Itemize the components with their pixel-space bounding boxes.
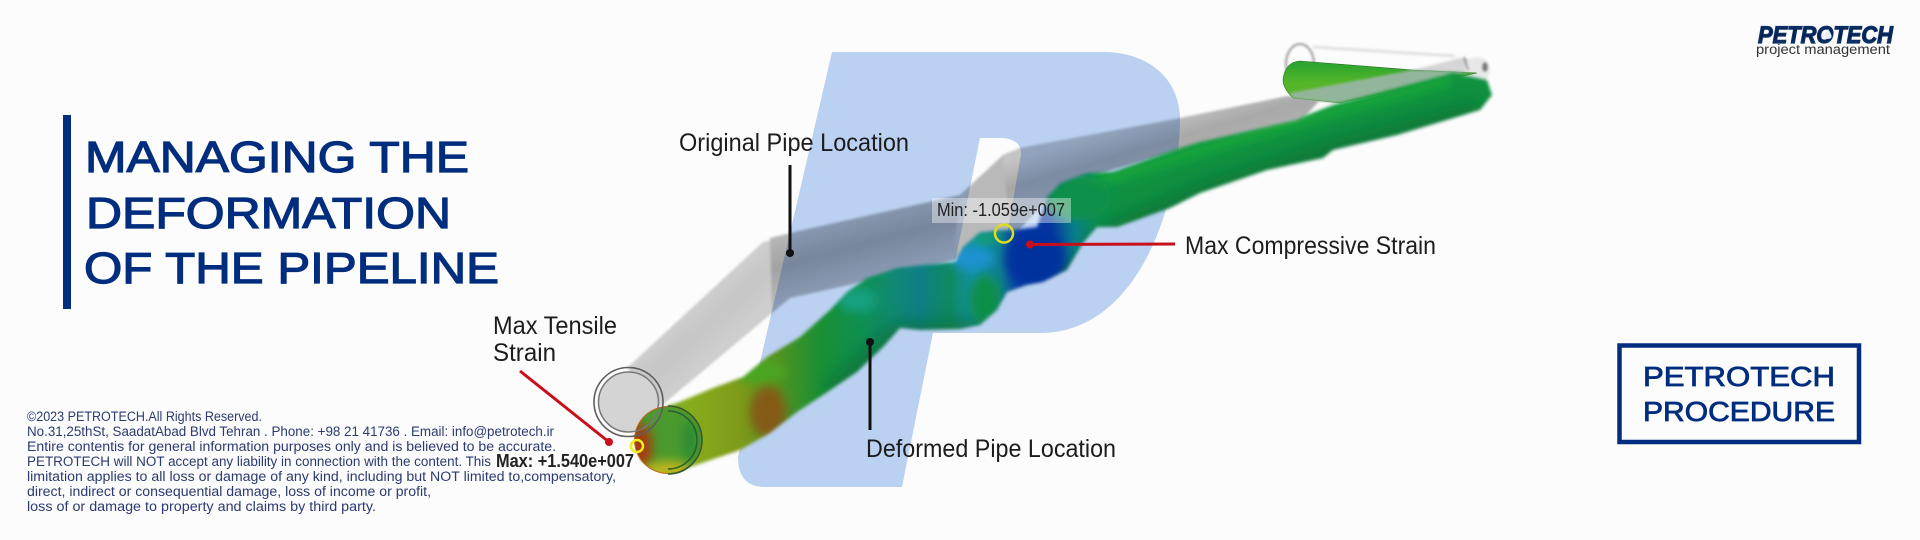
- logo: Petrotech project management: [1756, 22, 1894, 57]
- logo wordmark: PETROTECH: [1758, 22, 1894, 49]
- label: original pipe location: Original Pipe Location: [679, 129, 909, 157]
- logo tagline: project management: [1756, 42, 1890, 57]
- label: max tensile strain: Max Tensile: [493, 312, 617, 340]
- marker: max strain: [631, 440, 643, 452]
- diagram: pipeline deformation: [493, 44, 1510, 490]
- leader: deformed pipe: [866, 338, 874, 430]
- label: deformed pipe location: Deformed Pipe Location: [866, 435, 1116, 463]
- label: max compressive strain: Max Compressive Strain: [1185, 232, 1436, 260]
- title: DEFORMATION: [86, 189, 451, 238]
- footer legal text: [27, 409, 616, 514]
- label: max tensile strain: Strain: [493, 339, 556, 367]
- procedure box: [1620, 346, 1859, 442]
- label: min value: Min: -1.059e+007: [937, 200, 1065, 220]
- label: max value: Max: +1.540e+007: [496, 451, 634, 471]
- original grey pipe: [627, 44, 1490, 407]
- watermark: blue letter P: [738, 52, 1180, 487]
- title block: [63, 115, 499, 309]
- leader: max compressive strain: [1026, 240, 1175, 248]
- box text: PROCEDURE: [1643, 396, 1835, 427]
- box border: [1620, 346, 1859, 442]
- title: [84, 133, 499, 293]
- footer legal text: No.31,25thSt, SaadatAbad Blvd Tehran . Phone: +98 21 41736 . Email: info@petrotech.ir: [27, 424, 554, 439]
- min value tag: [932, 198, 1071, 223]
- box text: PETROTECH: [1643, 361, 1835, 392]
- deformed green pipe: [638, 70, 1494, 476]
- footer legal text: Entire contentis for general information purposes only and is believed to be accurate.: [27, 439, 556, 454]
- pipe mouths: [594, 368, 710, 480]
- footer legal text: ©2023 PETROTECH.All Rights Reserved.: [27, 409, 262, 424]
- leader: max tensile strain: [520, 371, 613, 446]
- footer legal text: PETROTECH will NOT accept any liability in connection with the content. This: [27, 454, 491, 469]
- footer legal text: loss of or damage to property and claims by third party.: [27, 499, 376, 514]
- box text: [1643, 361, 1835, 427]
- far end green wedge: [1283, 61, 1477, 103]
- title: MANAGING THE: [85, 133, 469, 182]
- marker: min strain: [995, 224, 1013, 242]
- logo oil drop: [1825, 29, 1832, 39]
- title accent bar: [63, 115, 71, 309]
- footer legal text: limitation applies to all loss or damage of any kind, including but NOT limited to,compensatory,: [27, 469, 616, 484]
- footer legal text: direct, indirect or consequential damage, loss of income or profit,: [27, 484, 431, 499]
- title: OF THE PIPELINE: [84, 244, 499, 293]
- leader: original pipe: [786, 165, 794, 257]
- label: max tensile strain: [493, 312, 617, 367]
